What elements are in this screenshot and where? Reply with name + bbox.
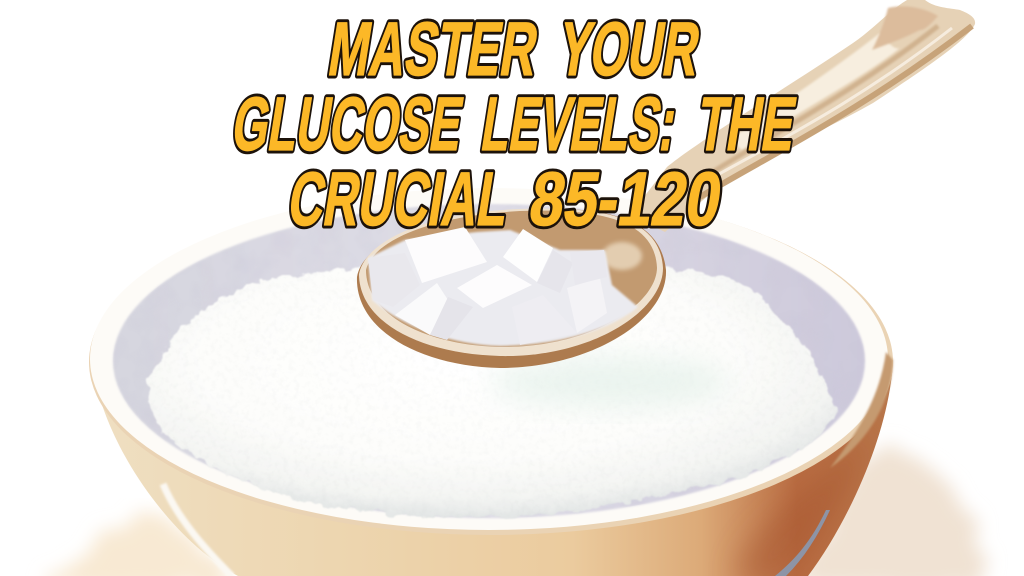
- spoon bowl back: [357, 209, 666, 368]
- bowl rim: [89, 189, 893, 535]
- spoon bowl inside: [366, 211, 657, 347]
- title line 2: GLUCOSE: [227, 82, 469, 167]
- cube 4: [537, 250, 573, 293]
- title: [227, 7, 802, 242]
- cube 9: [567, 278, 607, 333]
- handle light panel: [730, 33, 900, 150]
- cube 5: [457, 265, 532, 308]
- title line 2: GLUCOSE: [227, 82, 469, 167]
- cube 2: [368, 253, 420, 307]
- cube 6: [395, 283, 448, 335]
- bowl blue reflection: [775, 510, 830, 576]
- handle light edge: [712, 28, 952, 178]
- title line 2: [227, 82, 802, 167]
- title line 2: LEVELS:: [476, 82, 683, 167]
- title line 1: MASTER: [323, 7, 544, 92]
- bowl interior: [113, 204, 865, 518]
- spoon: [357, 0, 975, 368]
- sugar cubes: [368, 227, 638, 346]
- spoon bowl rim: [359, 209, 663, 356]
- cube 3: [503, 229, 553, 282]
- bowl shading: [732, 462, 852, 576]
- handle groove: [700, 26, 938, 180]
- spoon handle: [630, 0, 975, 232]
- title line 1: MASTER: [323, 7, 544, 92]
- bowl body: [92, 360, 893, 576]
- title line 2: THE: [692, 82, 802, 167]
- title line 3: CRUCIAL: [283, 157, 515, 242]
- interior wash: [637, 504, 638, 505]
- sugar pile: [148, 262, 838, 518]
- cube base: [368, 230, 638, 346]
- watercolor stain: left: [44, 510, 240, 576]
- watercolor stain: right: [790, 444, 985, 576]
- cube 8: [512, 295, 577, 345]
- cube 10: [570, 250, 607, 285]
- rim tan edge right: [830, 352, 893, 468]
- title line 3: CRUCIAL: [283, 157, 515, 242]
- bowl: [89, 188, 893, 576]
- sugar tint: [490, 356, 730, 408]
- spoon highlight: [602, 242, 642, 270]
- title line 3: 85-120: [524, 157, 728, 242]
- title line 2: THE: [692, 82, 802, 167]
- handle tip shade: [872, 6, 938, 50]
- bowl highlight: [163, 484, 232, 576]
- cube 1: [405, 227, 487, 283]
- handle underside: [700, 26, 972, 197]
- title line 3: 85-120: [524, 157, 728, 242]
- sugar grain: [140, 255, 845, 525]
- title line 1: YOUR: [553, 7, 706, 92]
- title line 2: LEVELS:: [476, 82, 683, 167]
- cube 7: [430, 297, 473, 340]
- title line 1: YOUR: [553, 7, 706, 92]
